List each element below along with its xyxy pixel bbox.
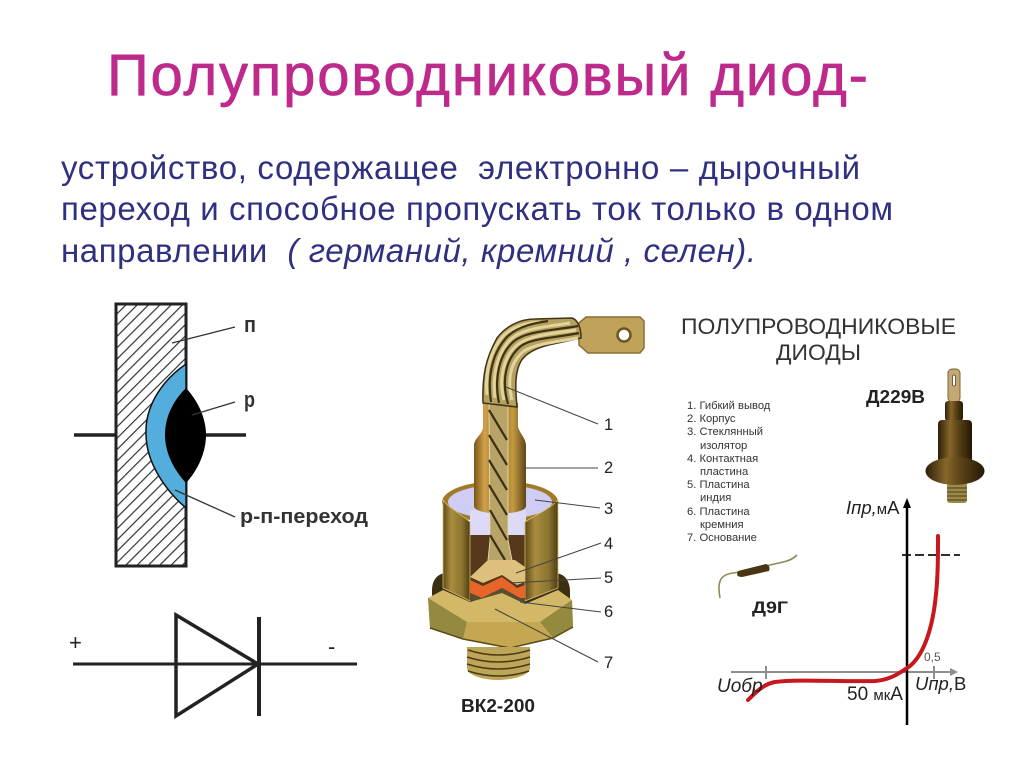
parts legend: 6. Пластина <box>687 506 750 518</box>
label: D229V: Д229В <box>866 387 925 407</box>
silicon plate (6) <box>470 588 525 604</box>
callout numbers <box>604 416 613 672</box>
axis label: forward current: Iпр,мА <box>846 497 900 518</box>
definition text block: направлении ( германий, кремний , селен). <box>61 232 756 269</box>
blue p-n junction layer <box>146 364 186 508</box>
terminal lug <box>579 317 644 353</box>
vertical axis <box>903 498 911 725</box>
parts legend: 4. Контактная <box>687 453 758 465</box>
device: D229V diode <box>926 369 984 503</box>
cavity <box>470 535 526 590</box>
leader lines <box>172 327 235 517</box>
case top rim and interior <box>442 481 558 523</box>
minus sign: - <box>328 634 335 659</box>
left case wall <box>443 500 470 601</box>
label: D9G: Д9Г <box>752 598 788 617</box>
definition text block: устройство, содержащее электронно – дырочный <box>61 149 860 186</box>
parts legend: 7. Основание <box>687 532 757 544</box>
hex nut base (7) <box>428 590 573 648</box>
device: D9G small diode <box>719 555 797 598</box>
callout numbers: 1 <box>604 416 613 434</box>
callout numbers: 3 <box>604 500 613 518</box>
label: p: р <box>244 387 255 412</box>
callout numbers: 5 <box>604 569 613 587</box>
diagram: p-n junction cross-section <box>74 304 368 566</box>
glass insulator <box>448 485 552 519</box>
callout lines <box>495 387 601 662</box>
right panel heading <box>681 314 956 365</box>
axis label: reverse voltage: Uобр <box>717 676 763 697</box>
semiconductor body (n region) <box>116 304 186 566</box>
parts legend: 2. Корпус <box>687 413 736 425</box>
contact plate (4) <box>470 560 525 585</box>
callout numbers: 2 <box>604 459 613 477</box>
definition text block <box>61 149 893 269</box>
current-voltage curve <box>748 536 938 700</box>
callout numbers: 4 <box>604 535 613 553</box>
plus sign: + <box>69 630 82 655</box>
right case wall <box>525 500 558 601</box>
dark flange ring <box>432 573 570 612</box>
right panel heading: ДИОДЫ <box>776 340 861 365</box>
parts legend: пластина <box>700 466 749 478</box>
parts legend: кремния <box>700 519 744 531</box>
device: VK2-200 power diode <box>428 317 644 716</box>
parts legend: 3. Стеклянный <box>687 426 763 438</box>
parts legend: 5. Пластина <box>687 479 750 491</box>
definition text block: переход и способное пропускать ток только в одном <box>61 190 893 227</box>
upper tube <box>474 403 526 514</box>
parts legend: 1. Гибкий вывод <box>687 400 771 412</box>
device label: ВК2-200 <box>461 696 535 716</box>
callout numbers: 6 <box>604 603 613 621</box>
parts legend: индия <box>700 492 731 504</box>
diode circuit symbol <box>69 615 357 716</box>
callout numbers: 7 <box>604 654 613 672</box>
axis label: forward voltage: Uпр,В <box>915 673 966 694</box>
dashed level line <box>902 554 960 556</box>
I-V characteristic chart <box>717 497 966 725</box>
horizontal axis <box>731 666 958 679</box>
parts legend: изолятор <box>700 440 747 452</box>
slit and lead through the tube <box>488 403 512 567</box>
tick value 0,5: 0,5 <box>924 650 941 664</box>
label: n: п <box>244 312 256 337</box>
terminals <box>74 433 246 437</box>
braided flexible lead <box>483 318 581 407</box>
parts legend <box>687 400 771 544</box>
black p region <box>165 388 206 483</box>
reverse current value: 50 мкА <box>847 684 903 705</box>
indium plate (5) <box>470 577 525 598</box>
title: Полупроводниковый диод- <box>107 43 868 108</box>
label: p-n junction: р-п-переход <box>240 506 368 528</box>
threaded stud <box>467 647 530 680</box>
right panel heading: ПОЛУПРОВОДНИКОВЫЕ <box>681 314 956 339</box>
